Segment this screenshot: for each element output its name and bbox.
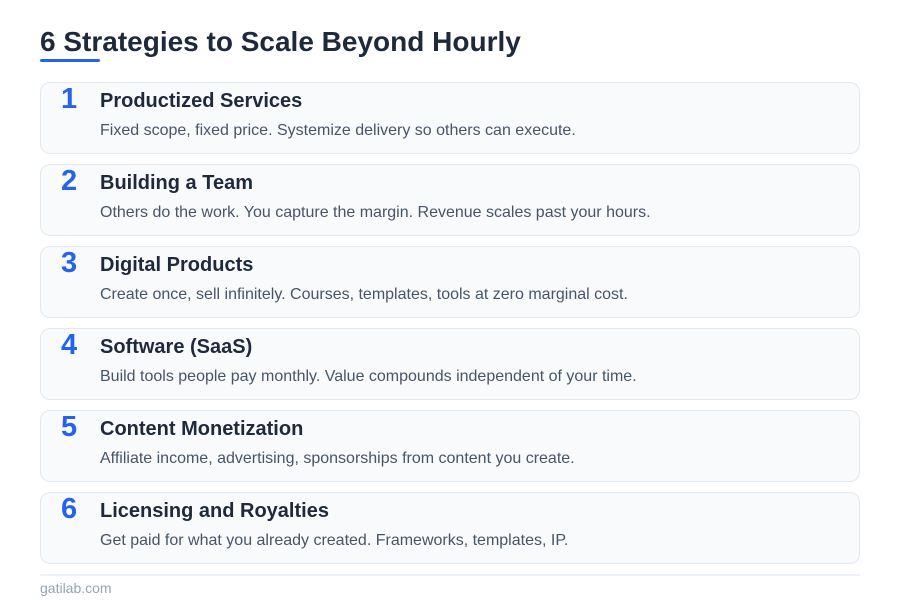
card 3: 3: [61, 247, 77, 279]
card 1: [40, 82, 860, 154]
footer: gatilab.com: [40, 580, 112, 596]
title: 6 Strategies to Scale Beyond Hourly: [40, 26, 521, 57]
card 5: [40, 410, 860, 482]
card 1: Fixed scope, fixed price. Systemize delivery so others can execute.: [100, 122, 576, 139]
card 4: Build tools people pay monthly. Value compounds independent of your time.: [100, 368, 637, 385]
card 4: 4: [61, 329, 77, 361]
card 2: Building a Team: [100, 172, 253, 194]
card 2: [40, 164, 860, 236]
card 3: Create once, sell infinitely. Courses, templates, tools at zero marginal cost.: [100, 286, 628, 303]
card 2: Others do the work. You capture the margin. Revenue scales past your hours.: [100, 204, 651, 221]
card 5: 5: [61, 411, 77, 443]
card 2: 2: [61, 165, 77, 197]
card 6: Get paid for what you already created. Frameworks, templates, IP.: [100, 532, 568, 549]
card 1: 1: [61, 83, 77, 115]
card 4: [40, 328, 860, 400]
card 5: Content Monetization: [100, 418, 303, 440]
card 6: [40, 492, 860, 564]
card 5: Affiliate income, advertising, sponsorships from content you create.: [100, 450, 575, 467]
card 4: Software (SaaS): [100, 336, 252, 358]
card 6: 6: [61, 493, 77, 525]
title underline: [40, 59, 100, 62]
card 3: Digital Products: [100, 254, 253, 276]
card 1: Productized Services: [100, 90, 302, 112]
card 6: Licensing and Royalties: [100, 500, 329, 522]
card 3: [40, 246, 860, 318]
